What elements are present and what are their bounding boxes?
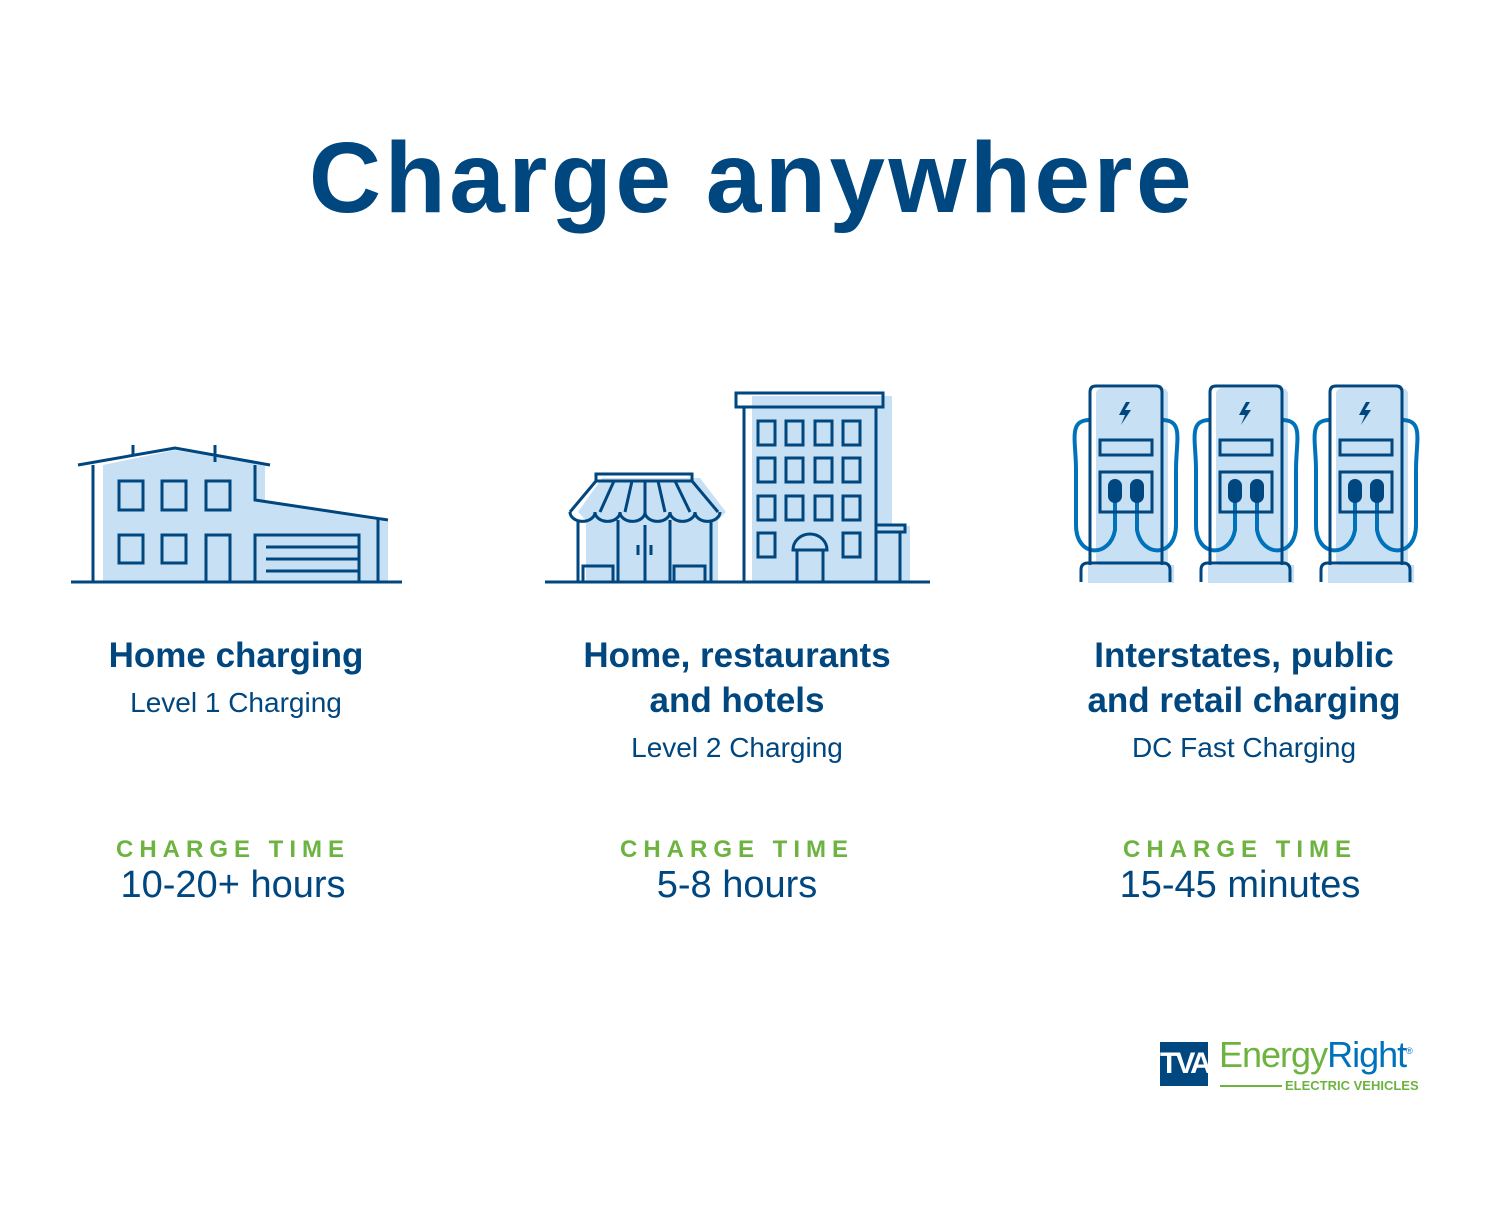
column 2 text bbox=[583, 636, 891, 763]
column 2 text: Level 2 Charging bbox=[631, 732, 843, 763]
column 2 text: and hotels bbox=[649, 681, 825, 720]
charge time 2: CHARGE TIME bbox=[620, 836, 854, 863]
column 2 text: Home, restaurants bbox=[583, 636, 891, 675]
charge time 1: 10-20+ hours bbox=[120, 864, 346, 906]
column 3 text: Interstates, public bbox=[1094, 636, 1394, 675]
logo: EnergyRight® bbox=[1219, 1034, 1412, 1075]
logo bbox=[1160, 1034, 1419, 1093]
charge time 1: CHARGE TIME bbox=[116, 836, 350, 863]
title: Charge anywhere bbox=[309, 122, 1195, 234]
charge time 3: 15-45 minutes bbox=[1120, 864, 1360, 906]
charge time 1 bbox=[116, 836, 350, 906]
column 3 text: DC Fast Charging bbox=[1132, 732, 1356, 763]
logo: ELECTRIC VEHICLES bbox=[1285, 1078, 1419, 1093]
logo: TVA bbox=[1160, 1047, 1209, 1080]
charge time 3 bbox=[1120, 836, 1360, 906]
charge time 3: CHARGE TIME bbox=[1123, 836, 1357, 863]
column 1 text: Level 1 Charging bbox=[130, 687, 342, 718]
column 1 text bbox=[109, 636, 363, 718]
column 3 text: and retail charging bbox=[1087, 681, 1401, 720]
column 1 text: Home charging bbox=[109, 636, 363, 675]
charge time 2 bbox=[620, 836, 854, 906]
column 3 text bbox=[1087, 636, 1401, 763]
charge time 2: 5-8 hours bbox=[657, 864, 817, 906]
